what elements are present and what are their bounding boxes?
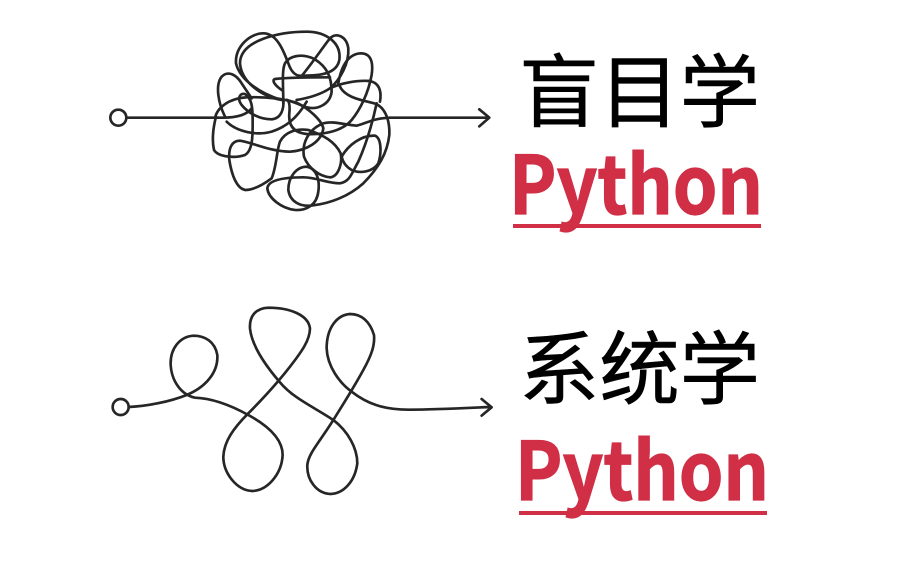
label: Python with underline: Python — [515, 408, 769, 524]
arrowhead — [482, 399, 492, 416]
heading: 系统学: 系统学 — [519, 306, 760, 422]
start circle — [110, 110, 126, 126]
looping line — [129, 308, 490, 494]
diagram: tangled path — [110, 32, 489, 210]
label: Python with underline: Python — [509, 122, 763, 238]
incoming line — [127, 108, 252, 118]
start circle — [113, 399, 129, 415]
diagram: orderly looping path — [113, 308, 492, 494]
outgoing arrow — [389, 109, 489, 126]
tangle scribble — [213, 32, 389, 210]
heading: 盲目学: 盲目学 — [519, 29, 760, 145]
